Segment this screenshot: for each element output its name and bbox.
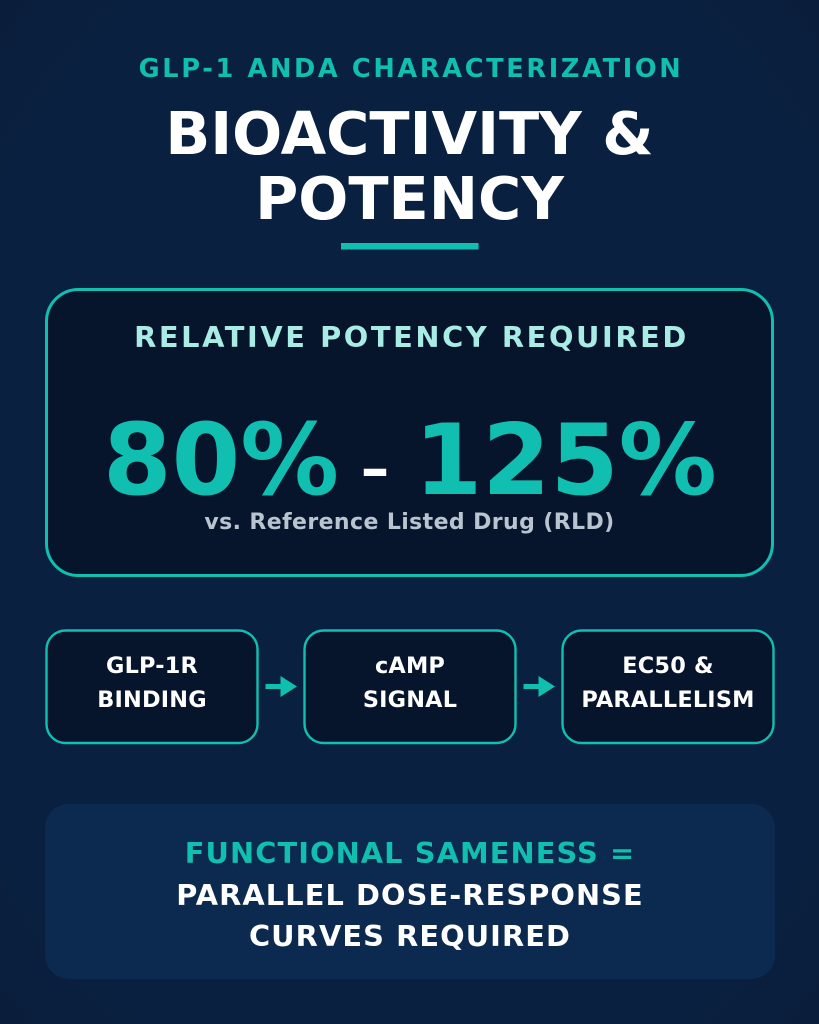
- title: BIOACTIVITY &: [165, 99, 654, 168]
- eyebrow heading: GLP-1 ANDA CHARACTERIZATION: [139, 54, 683, 84]
- step: cAMP signal: SIGNAL: [363, 687, 457, 713]
- panel heading: RELATIVE POTENCY REQUIRED: [134, 320, 689, 354]
- title accent bar: [341, 243, 478, 250]
- panel: relative potency: [46, 290, 772, 576]
- callout text: PARALLEL DOSE-RESPONSE: [176, 878, 644, 912]
- callout text: CURVES REQUIRED: [249, 919, 571, 953]
- step: GLP-1R binding: [46, 630, 258, 743]
- step: EC50 and parallelism: PARALLELISM: [581, 687, 755, 713]
- title: POTENCY: [255, 164, 565, 233]
- step: cAMP signal: cAMP: [375, 653, 445, 679]
- panel: functional sameness: [45, 804, 775, 979]
- step: GLP-1R binding: GLP-1R: [106, 653, 198, 679]
- step: GLP-1R binding: BINDING: [97, 687, 207, 713]
- potency range: –: [361, 436, 389, 502]
- potency range: 125%: [414, 404, 717, 518]
- callout text: [176, 878, 644, 953]
- step: EC50 and parallelism: EC50 &: [622, 653, 714, 679]
- potency range: [103, 403, 717, 518]
- step: cAMP signal: [304, 630, 516, 743]
- step: EC50 and parallelism: [562, 630, 774, 743]
- arrow 2: [524, 676, 555, 697]
- arrow 1: [266, 676, 297, 697]
- reference note: vs. Reference Listed Drug (RLD): [204, 510, 615, 535]
- potency range: 80%: [103, 403, 339, 518]
- title: [165, 99, 654, 233]
- callout heading: FUNCTIONAL SAMENESS =: [185, 836, 635, 870]
